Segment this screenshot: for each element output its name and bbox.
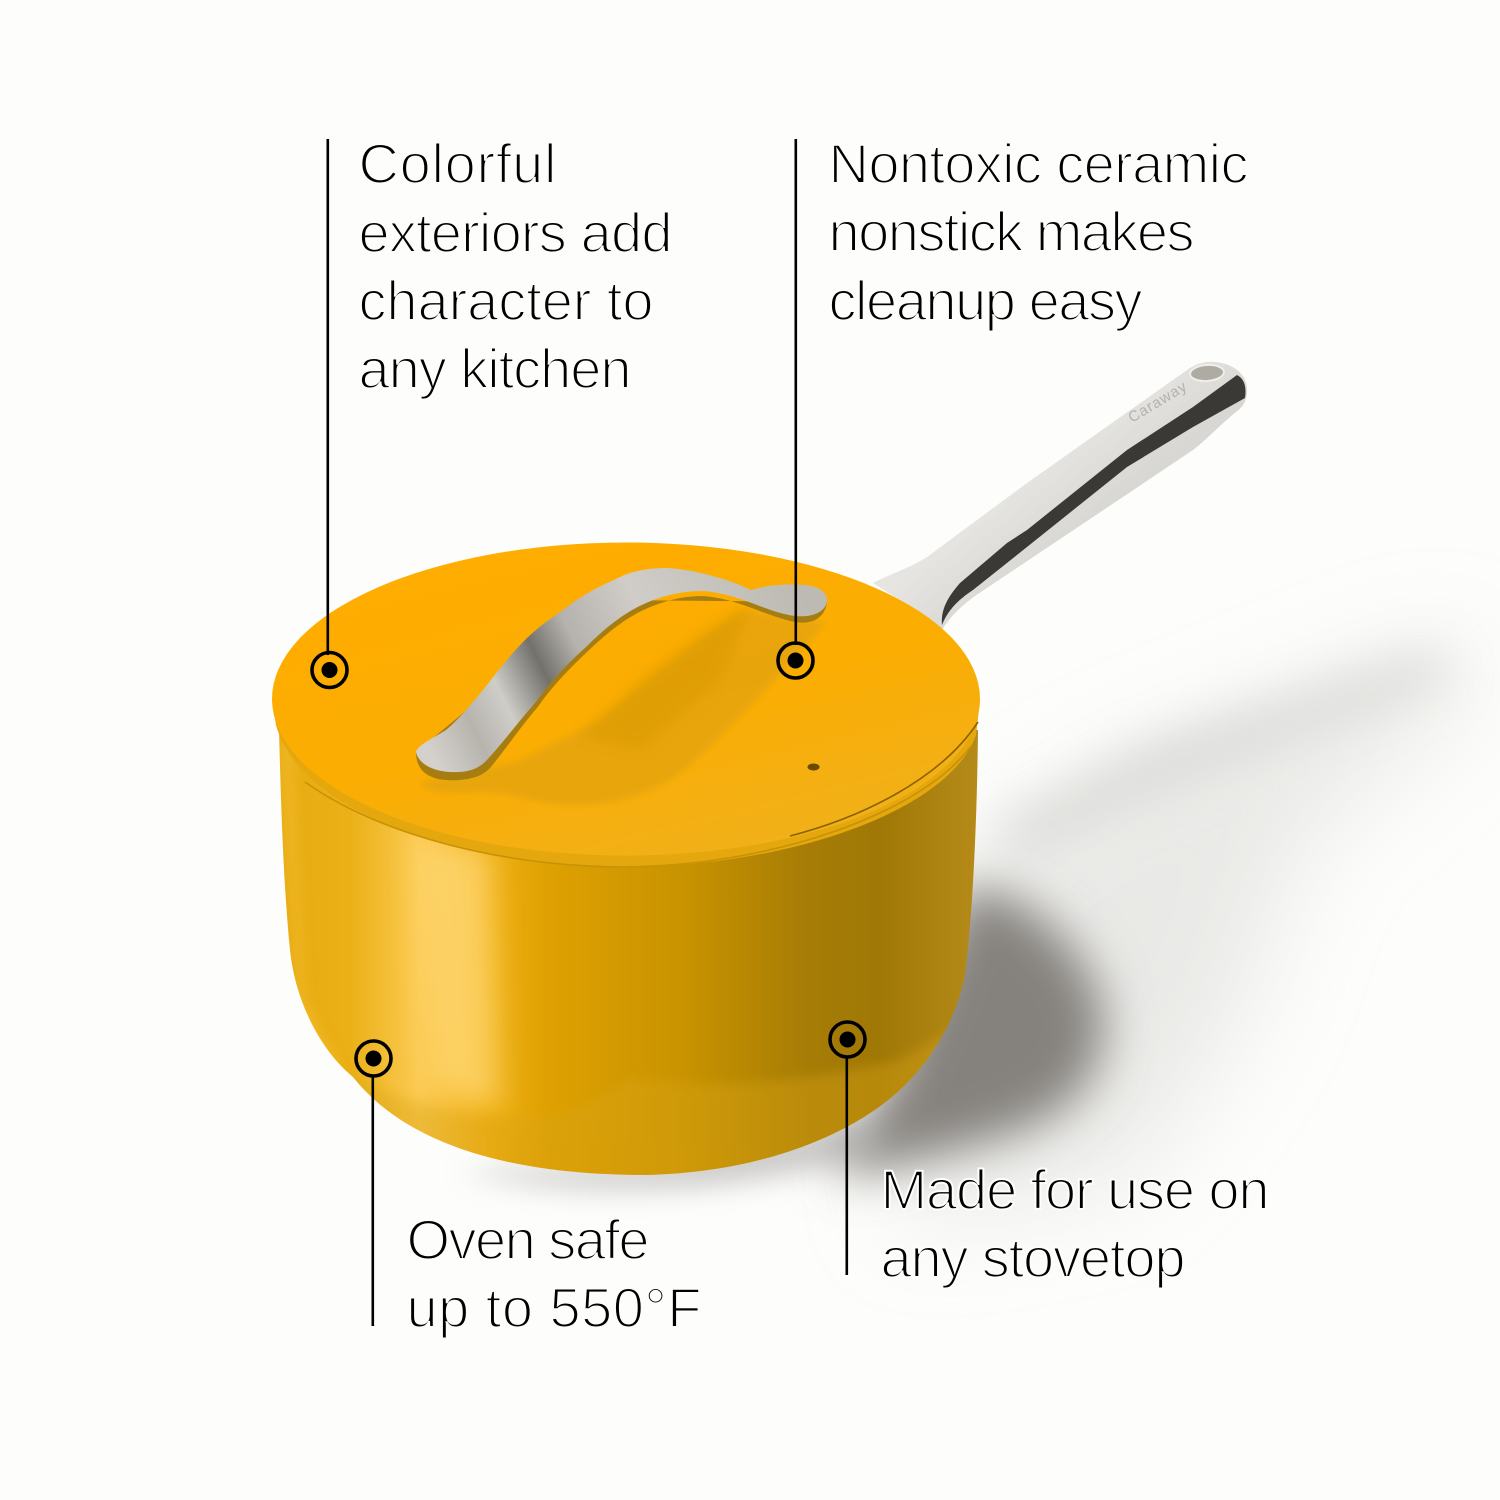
ground shadow — [460, 640, 1470, 1220]
steam vent — [808, 764, 820, 770]
text: nontoxic ceramic nonstick: nonstick makes — [828, 200, 1194, 263]
text: colorful exteriors: any kitchen — [358, 337, 632, 400]
lower rim band — [350, 1034, 943, 1175]
marker: any stovetop — [830, 1022, 865, 1057]
text: oven safe — [406, 1208, 702, 1339]
marker: nontoxic nonstick — [778, 643, 813, 678]
handle top surface — [416, 568, 827, 772]
handle shadow on lid — [418, 610, 826, 805]
infographic canvas — [272, 139, 1472, 1338]
callout line: colorful exteriors — [326, 139, 329, 655]
text: nontoxic ceramic nonstick — [828, 132, 1248, 332]
marker: oven safe — [356, 1041, 391, 1076]
text: nontoxic ceramic nonstick: cleanup easy — [828, 269, 1142, 332]
marker: colorful exteriors — [312, 652, 347, 688]
pot lid — [272, 542, 980, 867]
text: oven safe: Oven safe — [406, 1208, 650, 1271]
bright reflection on body — [415, 840, 500, 1110]
handle hanging hole — [1189, 364, 1225, 382]
text: any stovetop: any stovetop — [880, 1226, 1186, 1289]
callout line: oven safe — [372, 1076, 374, 1326]
callout line: any stovetop — [846, 1058, 848, 1275]
long pan handle — [873, 362, 1247, 630]
text: any stovetop: Made for use on — [880, 1158, 1270, 1221]
left edge light — [279, 740, 344, 1068]
text: nontoxic ceramic nonstick: Nontoxic ceramic — [828, 132, 1248, 195]
handle underside edge — [416, 596, 827, 780]
lid handle — [416, 568, 827, 780]
lid rim — [272, 700, 980, 867]
text: colorful exteriors: exteriors add — [358, 201, 672, 264]
callout line: nontoxic nonstick — [794, 139, 797, 645]
text: colorful exteriors: Colorful — [358, 132, 556, 195]
pot body — [279, 730, 1000, 1200]
handle brand engraving: Caraway — [1125, 378, 1190, 426]
handle dark underside — [942, 375, 1246, 625]
text: colorful exteriors: character to — [358, 269, 654, 332]
text: oven safe: up to 550°F — [406, 1276, 702, 1339]
text: colorful exteriors — [358, 132, 672, 400]
lid top surface — [272, 542, 980, 856]
text: any stovetop — [880, 1158, 1270, 1289]
